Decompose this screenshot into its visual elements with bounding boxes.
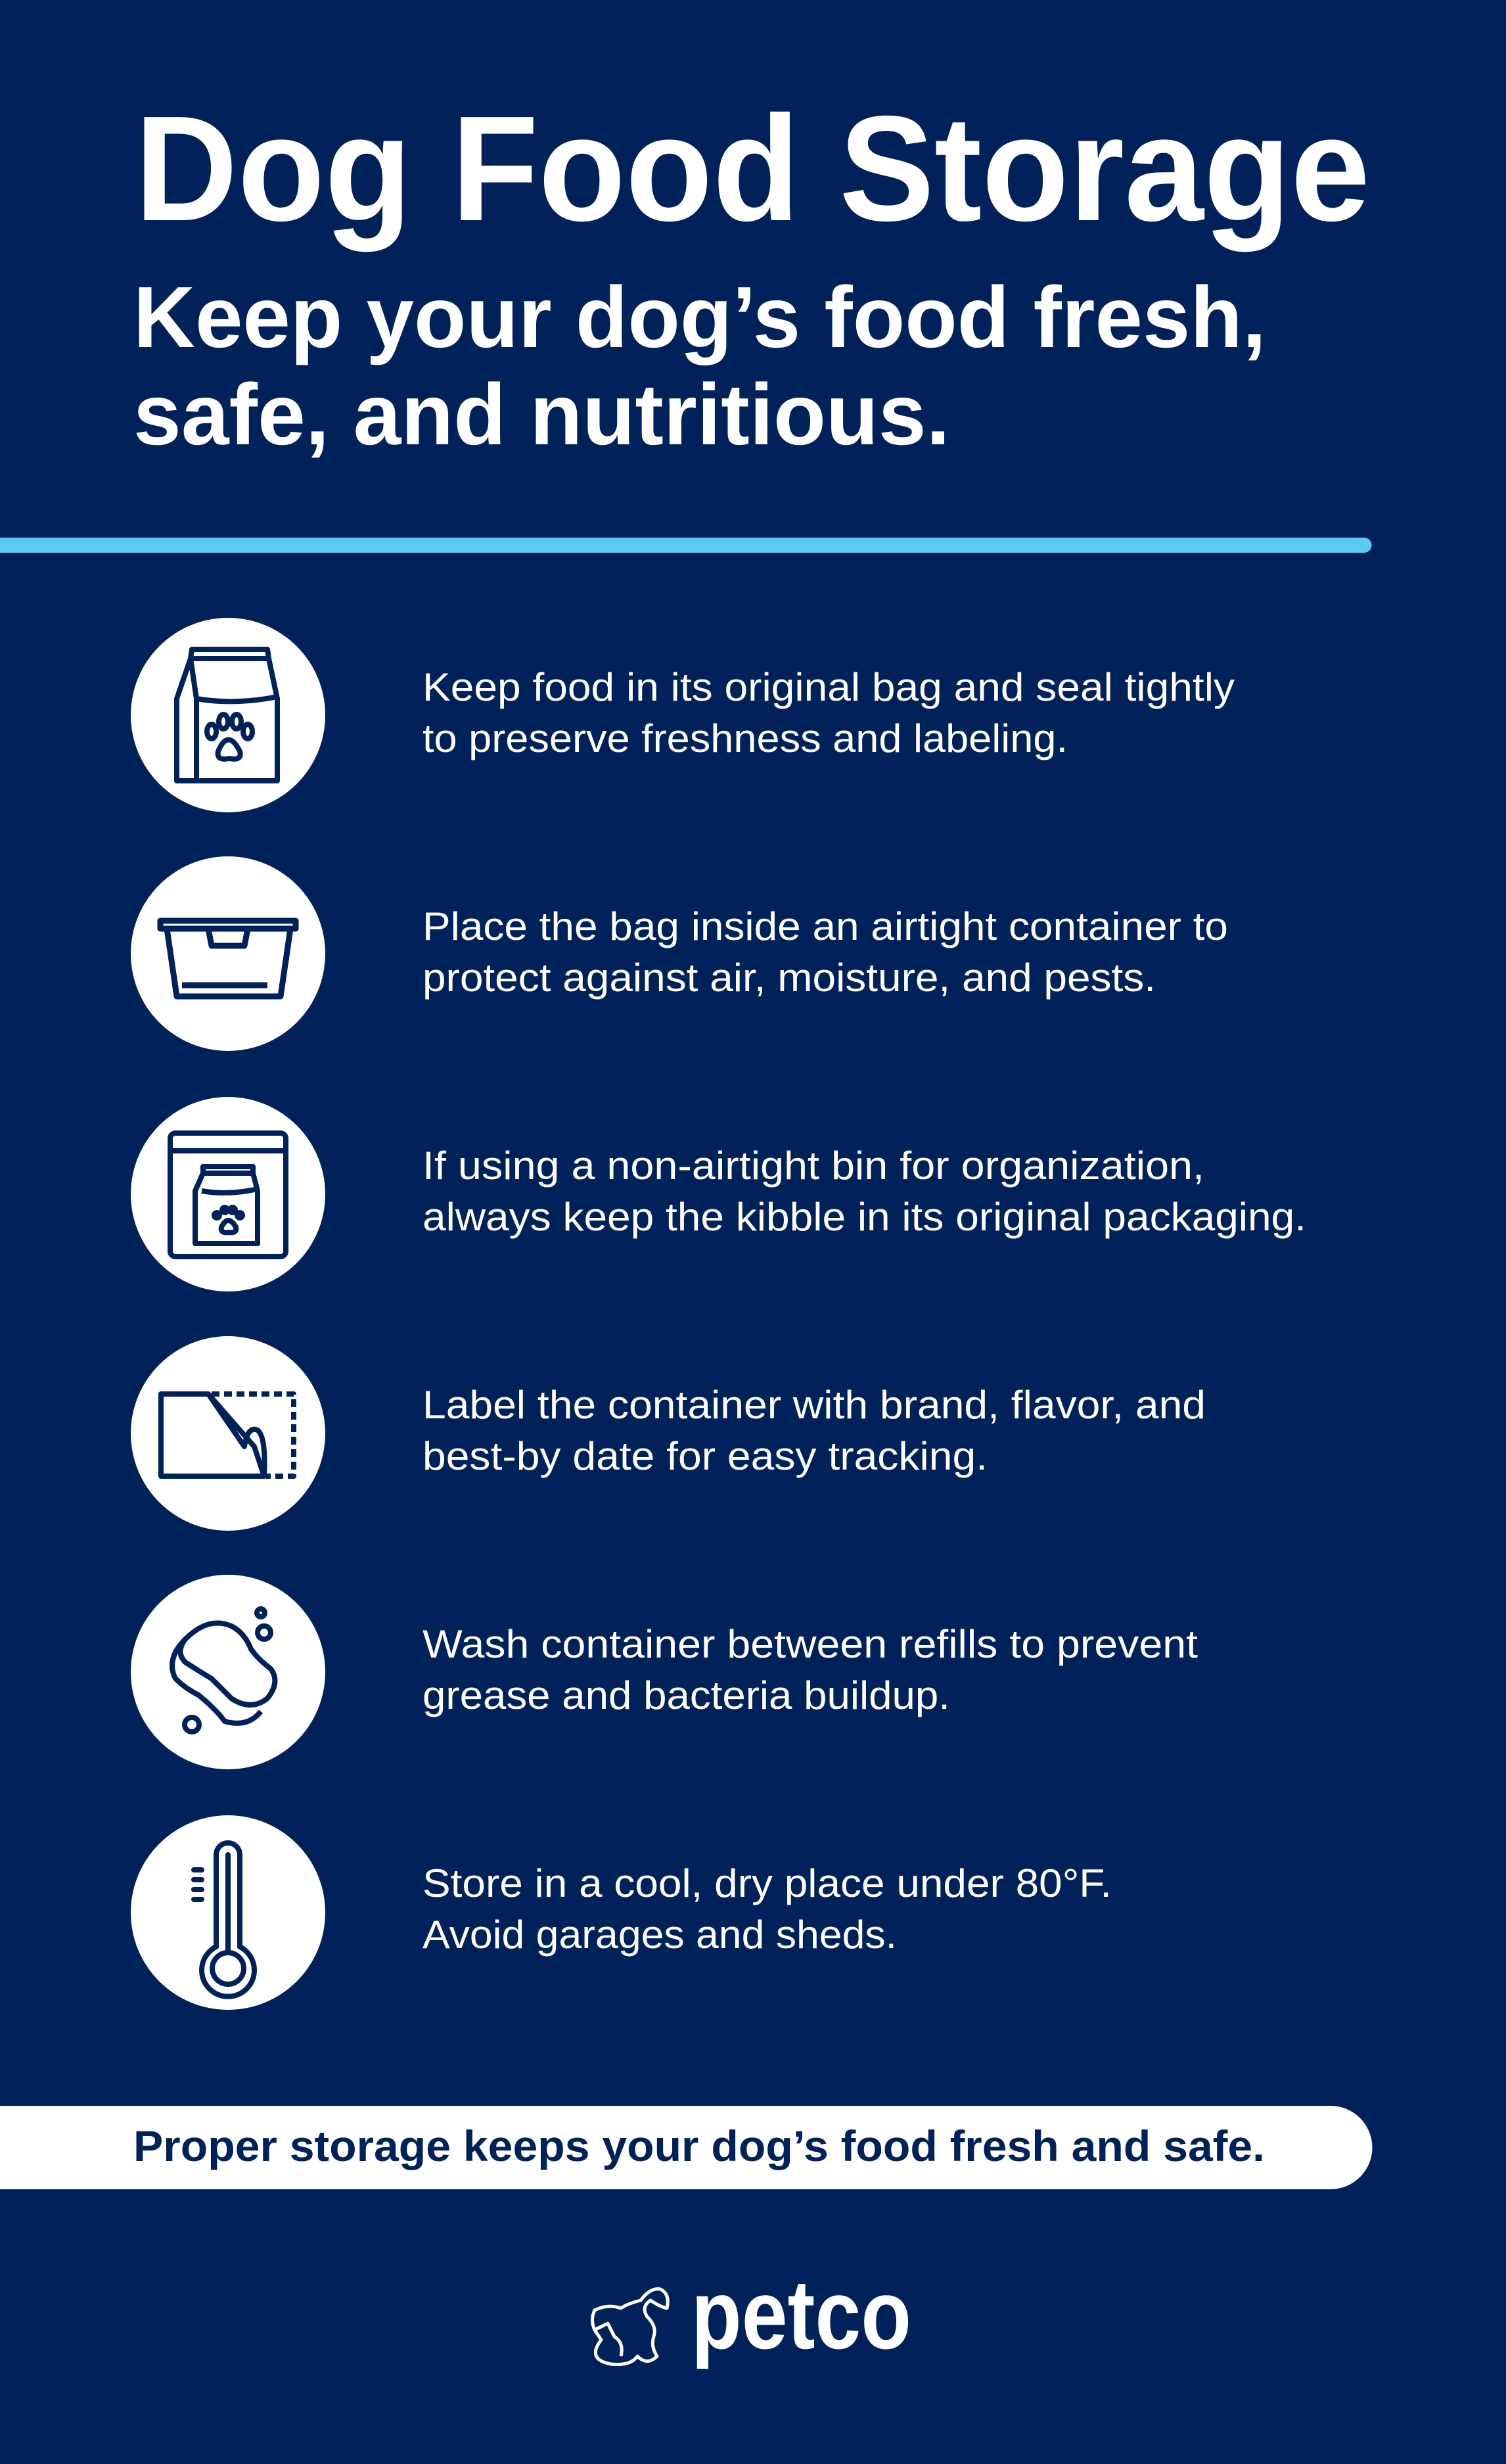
text: Avoid garages and sheds. [422, 1913, 897, 1957]
text: Keep food in its original bag and seal tightly [422, 665, 1235, 709]
icon: food bag [131, 618, 325, 812]
icon: peeling label [131, 1336, 325, 1531]
text [422, 665, 1235, 760]
text: If using a non-airtight bin for organization, [422, 1144, 1204, 1188]
text [422, 904, 1228, 1000]
callout footer bar: Proper storage keeps your dog’s food fresh and safe. [133, 2122, 1265, 2170]
text: Place the bag inside an airtight container to [422, 904, 1228, 948]
text: protect against air, moisture, and pests. [422, 956, 1156, 1000]
text: Wash container between refills to prevent [422, 1622, 1198, 1666]
logo: petco [593, 2259, 911, 2369]
icon: container [131, 856, 325, 1051]
item 6: temperature [131, 1815, 1112, 2010]
accent bar [0, 538, 1372, 553]
subtitle: Keep your dog’s food fresh, [133, 269, 1266, 365]
text [422, 1622, 1198, 1717]
logo: petco: petco [691, 2259, 911, 2369]
text [422, 1861, 1112, 1957]
text [422, 1144, 1306, 1239]
text: Label the container with brand, flavor, and [422, 1383, 1206, 1427]
text: best-by date for easy tracking. [422, 1434, 988, 1478]
icon: thermometer [131, 1815, 325, 2010]
item 3: non-airtight bin [131, 1097, 1306, 1291]
item 4: label [131, 1336, 1206, 1531]
subtitle [133, 269, 1266, 463]
subtitle: safe, and nutritious. [133, 366, 950, 463]
text: grease and bacteria buildup. [422, 1673, 950, 1717]
item 1: original bag [131, 618, 1235, 812]
icon: bin with bag [131, 1097, 325, 1291]
text [422, 1383, 1206, 1478]
text: always keep the kibble in its original packaging. [422, 1195, 1306, 1239]
text: Store in a cool, dry place under 80°F. [422, 1861, 1112, 1905]
text: to preserve freshness and labeling. [422, 716, 1068, 760]
item 2: airtight container [131, 856, 1228, 1051]
title: Dog Food Storage [135, 85, 1370, 252]
icon: sponge with bubbles [131, 1575, 325, 1769]
item 5: wash [131, 1575, 1198, 1769]
callout footer bar [0, 2106, 1372, 2189]
